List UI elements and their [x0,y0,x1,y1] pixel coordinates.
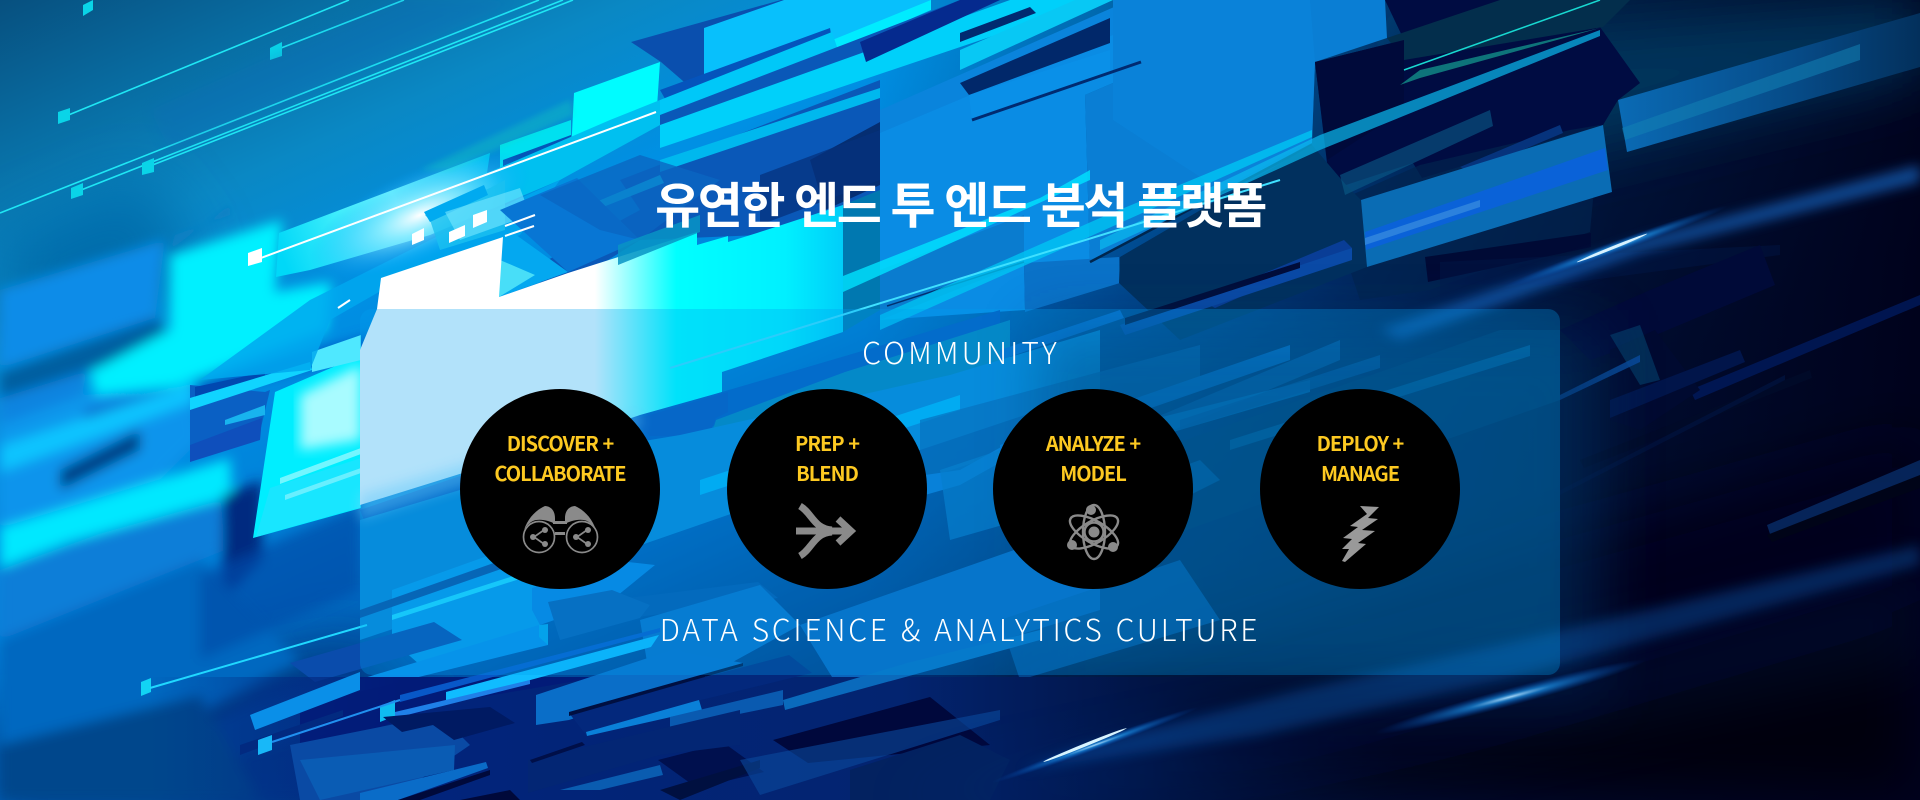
darkening beneath the right half of the panel [1040,330,1600,690]
circle: analyze + model: MODEL [1060,458,1126,487]
icon: merge arrow [796,506,852,556]
lower bottom dark field [150,677,1400,800]
circle: analyze + model: ANALYZE + [1046,428,1140,457]
title: 유연한 엔드 투 엔드 분석 플랫폼 [655,167,1265,238]
icon: binoculars [524,506,598,552]
circle: analyze + model [993,389,1193,589]
right lit panels [1361,125,1612,267]
heading: community: COMMUNITY [862,329,1060,373]
mid shards under the overlay [360,310,1000,560]
upper-right dark shards [1315,0,1640,185]
icon: lightning bolt [1342,506,1379,562]
bright white line chips [248,112,656,308]
left lower chips and streaks [141,625,400,755]
translucent content panel [360,309,1560,675]
circle: discover + collaborate: DISCOVER + [507,428,613,457]
glow streak right [1380,165,1920,340]
long thin top-left streaks [0,0,573,213]
circle: discover + collaborate [460,389,660,589]
lower-left crisp shards [392,540,540,665]
circle: deploy + manage: DEPLOY + [1317,428,1403,457]
cyan streaks through panels [880,130,1312,330]
sharp left shards [253,355,361,538]
bottom-right streak glow [880,545,1920,800]
blurred left shards [0,220,375,800]
footer text: culture: DATA SCIENCE & ANALYTICS CULTURE [660,606,1260,650]
circle: prep + blend: BLEND [796,458,858,487]
central glare [276,100,660,277]
centre blue panels [843,190,880,332]
circle: prep + blend: PREP + [795,428,859,457]
circle: deploy + manage: MANAGE [1321,458,1399,487]
circle: discover + collaborate: COLLABORATE [494,458,626,487]
circle: deploy + manage [1260,389,1460,589]
circle: prep + blend [727,389,927,589]
icon: atom [1065,505,1123,559]
mid-right dim shards [1690,295,1920,400]
top-left shards [631,0,930,100]
